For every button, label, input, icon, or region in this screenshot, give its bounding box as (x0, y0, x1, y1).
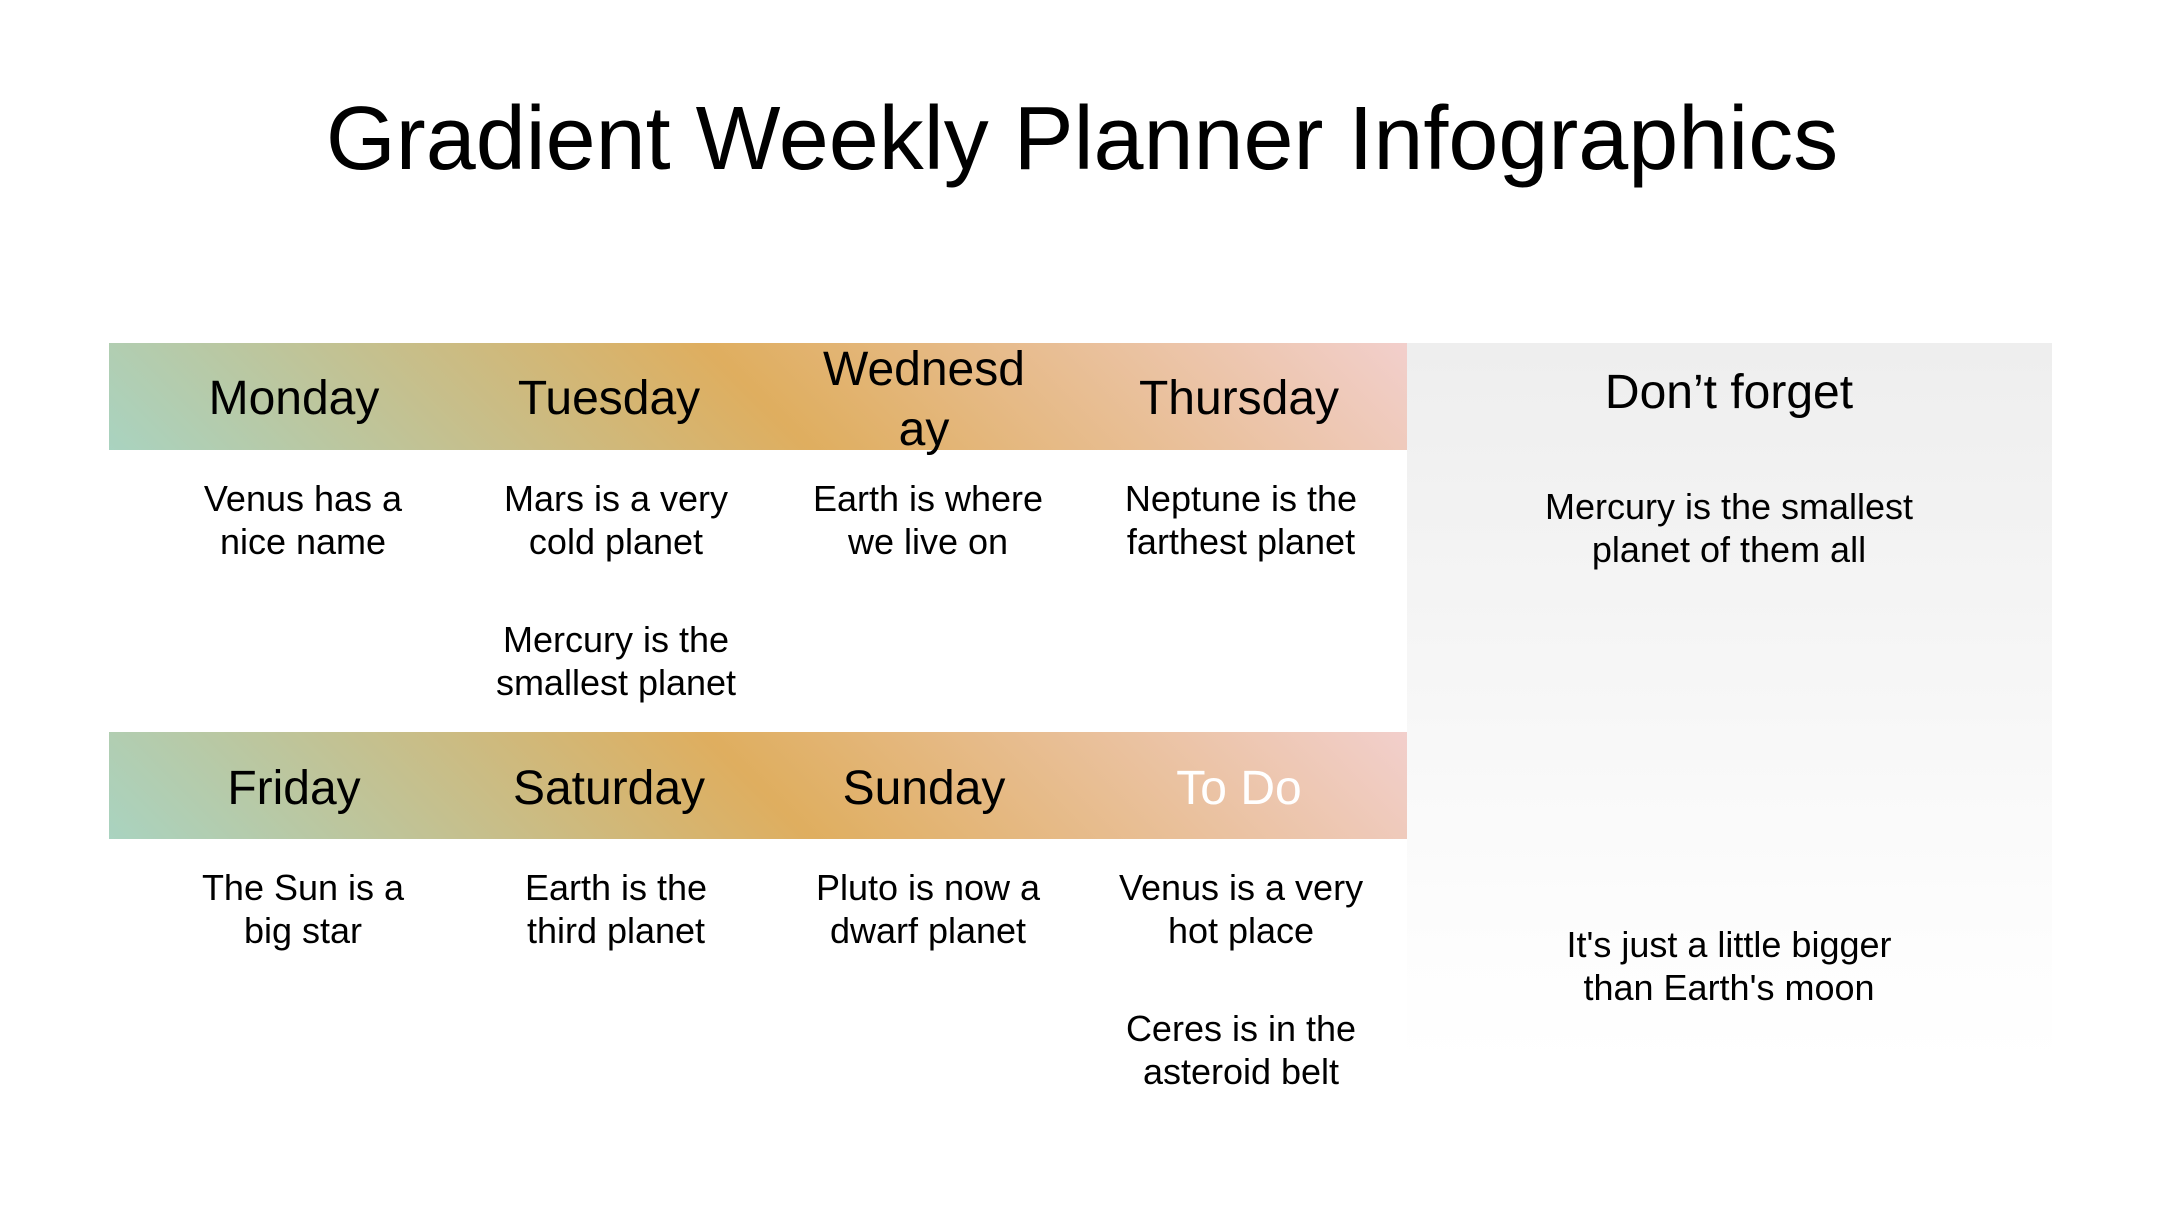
title: Gradient Weekly Planner Infographics (326, 89, 1838, 189)
header bar: row 2 (109, 732, 1407, 839)
Tuesday note 2: Mercury is the (503, 619, 729, 660)
To Do note 1 (1119, 867, 1363, 951)
Friday note (202, 867, 404, 951)
heading: don't forget: Don’t forget (1605, 366, 1853, 419)
day: Wednesday: Wednesd (823, 343, 1025, 396)
note: mercury (1545, 486, 1913, 570)
Sunday note (816, 867, 1040, 951)
Wednesday note: Earth is where (813, 478, 1043, 519)
note: mercury: Mercury is the smallest (1545, 486, 1913, 527)
To Do note 2: Ceres is in the (1126, 1008, 1356, 1049)
day: Saturday: Saturday (513, 762, 705, 815)
Saturday note: third planet (527, 910, 705, 951)
To Do note 2: asteroid belt (1143, 1051, 1339, 1092)
Sunday note: Pluto is now a (816, 867, 1040, 908)
Tuesday note 1: Mars is a very (504, 478, 728, 519)
Wednesday note: we live on (848, 521, 1008, 562)
day: Monday: Monday (209, 372, 379, 425)
note: mercury: planet of them all (1592, 529, 1866, 570)
day: Wednesday (823, 343, 1025, 456)
Friday note: The Sun is a (202, 867, 404, 908)
panel: don't forget (1407, 343, 2052, 1065)
header bar: row 1 (109, 343, 1407, 450)
Tuesday note 2 (496, 619, 736, 703)
Saturday note: Earth is the (525, 867, 707, 908)
Monday note: nice name (220, 521, 386, 562)
Thursday note: Neptune is the (1125, 478, 1357, 519)
day: Thursday: Thursday (1139, 372, 1339, 425)
day: Wednesday: ay (899, 403, 949, 456)
Monday note: Venus has a (204, 478, 402, 519)
Friday note: big star (244, 910, 362, 951)
Thursday note (1125, 478, 1357, 562)
Saturday note (525, 867, 707, 951)
Tuesday note 1: cold planet (529, 521, 703, 562)
note: bigger than moon: It's just a little bigger (1566, 924, 1892, 965)
Thursday note: farthest planet (1127, 521, 1355, 562)
note: bigger than moon: than Earth's moon (1583, 967, 1875, 1008)
Wednesday note (813, 478, 1043, 562)
day: Tuesday: Tuesday (518, 372, 700, 425)
To Do note 1: hot place (1168, 910, 1314, 951)
To Do note 1: Venus is a very (1119, 867, 1363, 908)
to do heading: To Do (1176, 762, 1302, 815)
Sunday note: dwarf planet (830, 910, 1026, 951)
day: Friday: Friday (227, 762, 361, 815)
Tuesday note 1 (504, 478, 728, 562)
Tuesday note 2: smallest planet (496, 662, 736, 703)
note: bigger than moon (1566, 924, 1892, 1008)
Monday note (204, 478, 402, 562)
To Do note 2 (1126, 1008, 1356, 1092)
day: Sunday: Sunday (843, 762, 1005, 815)
